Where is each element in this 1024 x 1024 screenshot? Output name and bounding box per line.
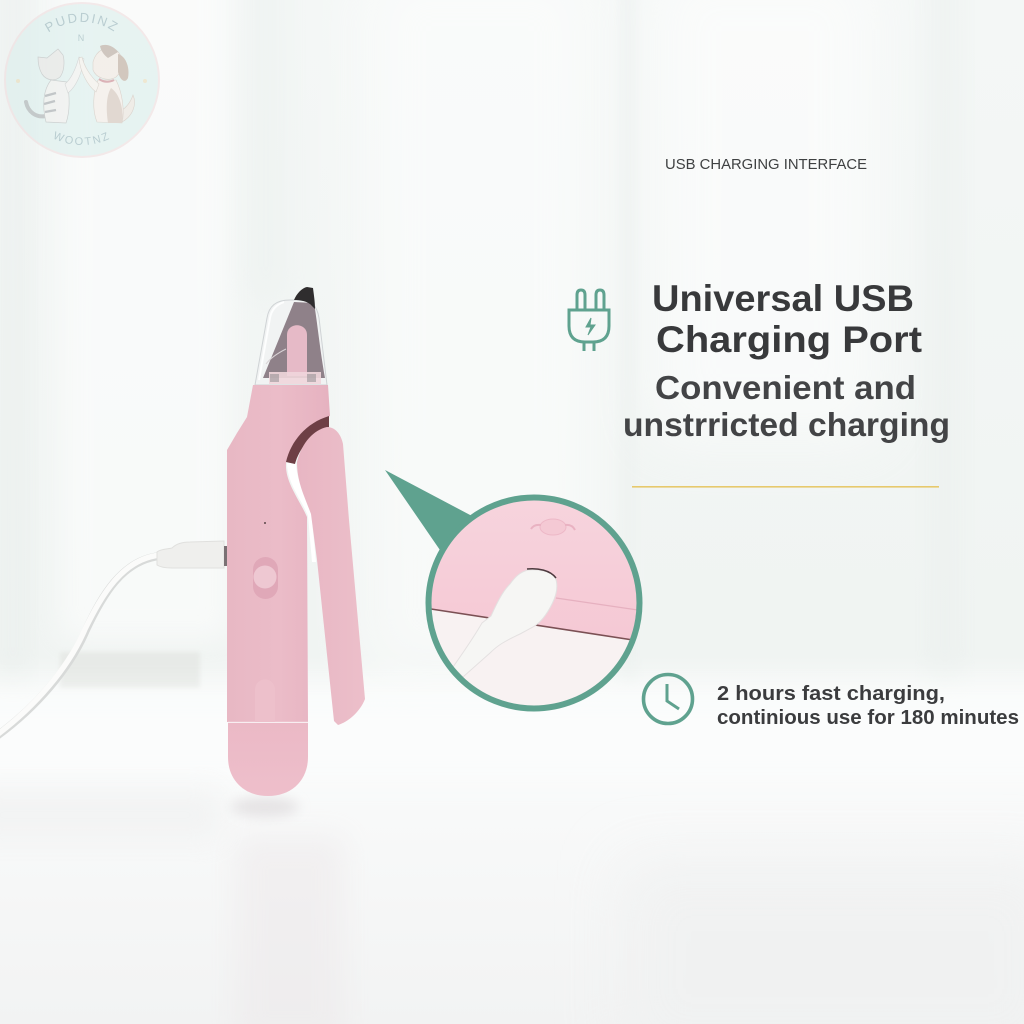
- callout pointer: [385, 470, 472, 553]
- caption: usb charging interface: USB CHARGING INTERFACE: [665, 157, 867, 173]
- cap seam: [228, 721, 308, 723]
- logo cat: [26, 49, 84, 123]
- inset cable: [453, 570, 557, 677]
- bottom slider: [255, 680, 275, 722]
- device clipper: [227, 287, 365, 796]
- icon: clock: [644, 674, 692, 724]
- cable: [0, 555, 160, 738]
- subheading: Convenient and: [655, 369, 916, 406]
- icon: plug: [569, 290, 609, 351]
- device dark arc: [286, 416, 329, 464]
- charging time note: 2 hours fast charging,: [717, 683, 945, 705]
- logo badge: [4, 2, 160, 158]
- logo text middle: N: [78, 33, 84, 43]
- heading: [652, 278, 922, 360]
- indicator dot: [264, 522, 266, 524]
- device bottom cap: [228, 723, 308, 796]
- logo text bottom: WOOTNZ: [54, 131, 110, 145]
- blade tip: [294, 287, 315, 309]
- device main body: [227, 385, 330, 722]
- switch slot: [253, 557, 278, 599]
- subheading: unstrricted charging: [623, 406, 950, 443]
- logo star right: [143, 79, 147, 83]
- inset button: [531, 519, 575, 535]
- device cap clear: [255, 287, 327, 385]
- logo dog: [79, 45, 135, 123]
- inset device body: [432, 500, 636, 639]
- logo text top: PUDDINZ: [44, 12, 118, 32]
- blade dark: [263, 302, 325, 378]
- subheading: [623, 369, 950, 443]
- device lever slot highlight: [287, 462, 316, 562]
- blade post: [287, 325, 307, 376]
- device lever: [297, 427, 365, 725]
- charging time note: continious use for 180 minutes: [717, 707, 1019, 729]
- charging time note: [717, 683, 1019, 729]
- heading: Universal USB: [652, 278, 914, 319]
- logo star left: [16, 79, 20, 83]
- cable connector: [157, 541, 228, 568]
- callout inset circle: [426, 494, 642, 712]
- heading: Charging Port: [656, 319, 922, 360]
